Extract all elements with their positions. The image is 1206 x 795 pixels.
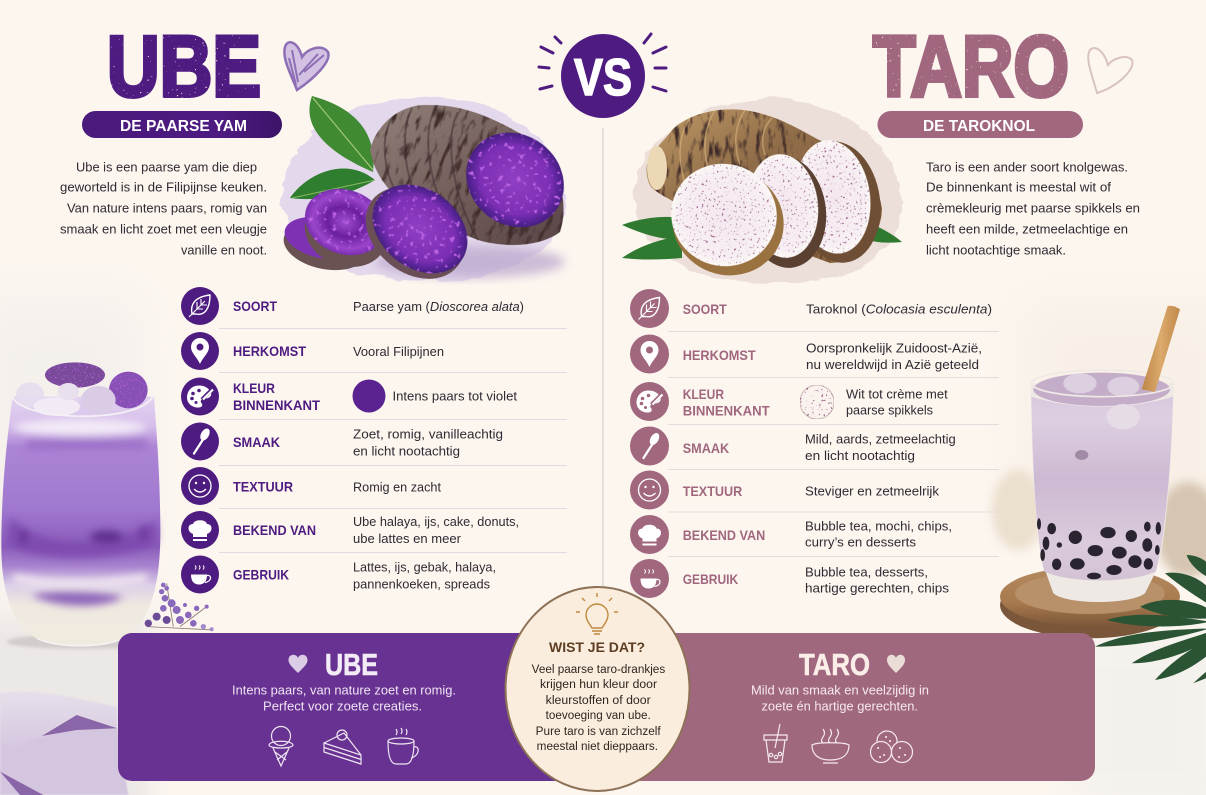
whole tuber bbox=[647, 109, 882, 263]
row: herkomst bbox=[630, 334, 982, 374]
row: soort bbox=[630, 289, 992, 328]
whole tuber bbox=[325, 43, 609, 307]
brush background bbox=[634, 98, 902, 283]
row: gebruik: GEBRUIK bbox=[233, 566, 289, 582]
icon: cake bbox=[324, 730, 361, 764]
callout text: Pure taro is van zichzelf bbox=[536, 726, 662, 738]
row: gebruik: GEBRUIK bbox=[683, 571, 738, 587]
ube drink illustration bbox=[0, 362, 214, 795]
row: smaak: Zoet, romig, vanilleachtig bbox=[353, 426, 503, 442]
slice 3 bbox=[788, 135, 888, 268]
taro bubble tea illustration bbox=[1000, 306, 1206, 683]
taro description: Taro is een ander soort knolgewas. bbox=[926, 160, 1128, 174]
row: smaak: en licht nootachtig bbox=[805, 448, 915, 463]
callout text: Veel paarse taro-drankjes bbox=[532, 664, 665, 676]
row: bekend van bbox=[181, 511, 519, 549]
glass rim bbox=[13, 393, 154, 646]
row: gebruik: Bubble tea, desserts, bbox=[805, 564, 928, 580]
ube description: vanille en noot. bbox=[181, 242, 267, 258]
icon: ube heart bbox=[284, 42, 329, 90]
row: textuur bbox=[630, 470, 940, 510]
row: herkomst: nu wereldwijd in Azië geteeld bbox=[806, 357, 979, 372]
icon: taro heart bbox=[1088, 48, 1132, 93]
summary text bbox=[232, 684, 456, 714]
taro subtitle pill: DE TAROKNOL bbox=[923, 118, 1035, 135]
callout text bbox=[532, 664, 665, 753]
row: bekend van: ube lattes en meer bbox=[353, 531, 462, 546]
glass with swirled milk bbox=[1, 397, 160, 646]
sparkle rays bbox=[539, 34, 666, 91]
ube root illustration bbox=[279, 43, 609, 307]
row: textuur: Steviger en zetmeelrijk bbox=[805, 484, 940, 498]
row: gebruik: hartige gerechten, chips bbox=[805, 580, 950, 596]
row: kleur binnenkant: BINNENKANT bbox=[683, 402, 770, 418]
ube label: UBE bbox=[325, 647, 378, 682]
brush background bbox=[282, 97, 566, 280]
ice cubes bbox=[1033, 373, 1170, 429]
backdrop: right table bbox=[992, 300, 1206, 795]
row: soort: Paarse yam (Dioscorea alata) bbox=[353, 299, 524, 314]
ube title: UBE bbox=[107, 19, 261, 115]
table shadow bbox=[7, 634, 153, 649]
row: bekend van: BEKEND VAN bbox=[683, 527, 765, 543]
row: gebruik: Lattes, ijs, gebak, halaya, bbox=[353, 560, 496, 574]
row: textuur: TEXTUUR bbox=[683, 483, 742, 499]
row: kleur binnenkant: Wit tot crème met bbox=[846, 386, 948, 402]
vs badge bbox=[539, 34, 666, 118]
slice 1 bbox=[657, 149, 799, 291]
row: textuur: TEXTUUR bbox=[233, 478, 293, 494]
summary text: zoete én hartige gerechten. bbox=[762, 700, 918, 714]
ground shadow bbox=[375, 246, 565, 278]
row: kleur binnenkant: paarse spikkels bbox=[846, 402, 933, 418]
callout text: kleurstoffen of door bbox=[546, 695, 651, 707]
heart bbox=[887, 655, 905, 673]
row: soort bbox=[181, 287, 524, 325]
slice 1 bbox=[348, 166, 485, 298]
tapioca pearls bbox=[1037, 450, 1161, 579]
row: herkomst: Oorspronkelijk Zuidoost-Azië, bbox=[806, 340, 982, 356]
callout: wist je dat bbox=[506, 587, 690, 791]
taro description bbox=[926, 160, 1140, 258]
cut face bbox=[447, 113, 583, 247]
ice and purple topping bbox=[16, 362, 148, 416]
summary text bbox=[751, 684, 929, 714]
taro subtitle pill bbox=[878, 111, 1083, 138]
panel: ube summary bbox=[118, 633, 600, 781]
row: kleur binnenkant bbox=[181, 378, 517, 416]
callout heading: WIST JE DAT? bbox=[549, 639, 645, 655]
row: gebruik: pannenkoeken, spreads bbox=[353, 576, 490, 592]
taro description: crèmekleurig met paarse spikkels en bbox=[926, 200, 1140, 216]
row: smaak: SMAAK bbox=[233, 434, 280, 450]
taro label: TARO bbox=[799, 647, 870, 682]
center divider bbox=[602, 128, 604, 590]
taro root illustration bbox=[622, 98, 902, 291]
row: gebruik bbox=[181, 556, 496, 594]
glass rim bbox=[1032, 370, 1174, 397]
callout text: meestal niet dieppaars. bbox=[537, 741, 658, 753]
wooden coaster bbox=[1000, 567, 1180, 638]
icon: soup bowl bbox=[812, 729, 849, 763]
summary text: Intens paars, van nature zoet en romig. bbox=[232, 684, 456, 698]
summary text: Mild van smaak en veelzijdig in bbox=[751, 684, 929, 698]
row: herkomst bbox=[181, 332, 444, 370]
green leaves bbox=[622, 217, 902, 260]
slice 2 bbox=[740, 151, 832, 272]
row: herkomst: HERKOMST bbox=[683, 347, 756, 363]
ube subtitle pill: DE PAARSE YAM bbox=[120, 118, 247, 135]
callout text: krijgen hun kleur door bbox=[540, 679, 657, 691]
row: soort: SOORT bbox=[683, 301, 727, 317]
icon: bubble tea bbox=[764, 724, 787, 762]
tuber ridges bbox=[680, 110, 772, 185]
palm leaves bbox=[1095, 555, 1206, 683]
row: bekend van: Bubble tea, mochi, chips, bbox=[805, 518, 952, 534]
taro comparison table bbox=[630, 289, 999, 598]
callout text: toevoeging van ube. bbox=[546, 710, 651, 722]
ube description bbox=[60, 160, 267, 258]
taro description: heeft een milde, zetmeelachtige en bbox=[926, 222, 1128, 236]
lavender sprig bbox=[145, 583, 214, 631]
row: herkomst: HERKOMST bbox=[233, 343, 306, 359]
panel: taro summary bbox=[600, 633, 1095, 781]
ube comparison table bbox=[181, 287, 567, 594]
green leaves bbox=[290, 96, 375, 199]
row: kleur binnenkant: BINNENKANT bbox=[233, 397, 320, 413]
napkin bbox=[0, 691, 128, 795]
taro description: De binnenkant is meestal wit of bbox=[926, 180, 1111, 194]
straw bbox=[1142, 306, 1180, 392]
row: smaak bbox=[630, 426, 956, 466]
row: kleur binnenkant: KLEUR bbox=[233, 380, 275, 396]
slice 3 bbox=[279, 211, 371, 277]
row: textuur bbox=[181, 467, 441, 505]
ube description: Ube is een paarse yam die diep bbox=[76, 160, 257, 174]
row: smaak bbox=[181, 422, 503, 460]
tuber tip bbox=[647, 146, 667, 190]
icon: light bulb bbox=[576, 593, 618, 634]
glass bbox=[1031, 383, 1174, 602]
row: herkomst: Vooral Filipijnen bbox=[353, 344, 444, 359]
row: kleur binnenkant bbox=[630, 382, 948, 421]
icon: coffee cup bbox=[388, 728, 418, 764]
napkin fold bbox=[0, 715, 117, 795]
row: smaak: Mild, aards, zetmeelachtig bbox=[805, 432, 956, 446]
taro title: TARO bbox=[872, 19, 1069, 115]
row: bekend van: BEKEND VAN bbox=[233, 522, 316, 538]
row: bekend van bbox=[630, 515, 952, 554]
row: soort: Taroknol (Colocasia esculenta ) bbox=[806, 302, 992, 316]
swirls bbox=[7, 419, 157, 606]
heart bbox=[288, 655, 308, 673]
icon: cookies bbox=[870, 731, 912, 762]
ube subtitle pill bbox=[82, 111, 282, 138]
row: kleur binnenkant: Intens paars tot violet bbox=[392, 388, 517, 404]
row: smaak: en licht nootachtig bbox=[353, 444, 460, 458]
milk bbox=[1031, 397, 1173, 580]
ube description: geworteld is in de Filipijnse keuken. bbox=[60, 180, 267, 194]
ube description: smaak en licht zoet met een vleugje bbox=[60, 222, 267, 236]
icon: ice cream bbox=[269, 726, 293, 766]
taro description: licht nootachtige smaak. bbox=[926, 242, 1066, 258]
summary text: Perfect voor zoete creaties. bbox=[263, 700, 422, 714]
slice 2 bbox=[295, 178, 397, 278]
ube description: Van nature intens paars, romig van bbox=[67, 200, 267, 216]
row: gebruik bbox=[630, 559, 950, 598]
row: kleur binnenkant: KLEUR bbox=[683, 386, 724, 402]
row: soort: SOORT bbox=[233, 298, 277, 314]
backdrop: left table bbox=[0, 300, 150, 795]
vs badge: VS bbox=[574, 49, 632, 107]
row: bekend van: Ube halaya, ijs, cake, donuts, bbox=[353, 514, 519, 529]
row: smaak: SMAAK bbox=[683, 440, 729, 456]
row: bekend van: curry’s en desserts bbox=[805, 534, 917, 550]
row: textuur: Romig en zacht bbox=[353, 480, 441, 494]
tuber ridges bbox=[385, 106, 478, 240]
